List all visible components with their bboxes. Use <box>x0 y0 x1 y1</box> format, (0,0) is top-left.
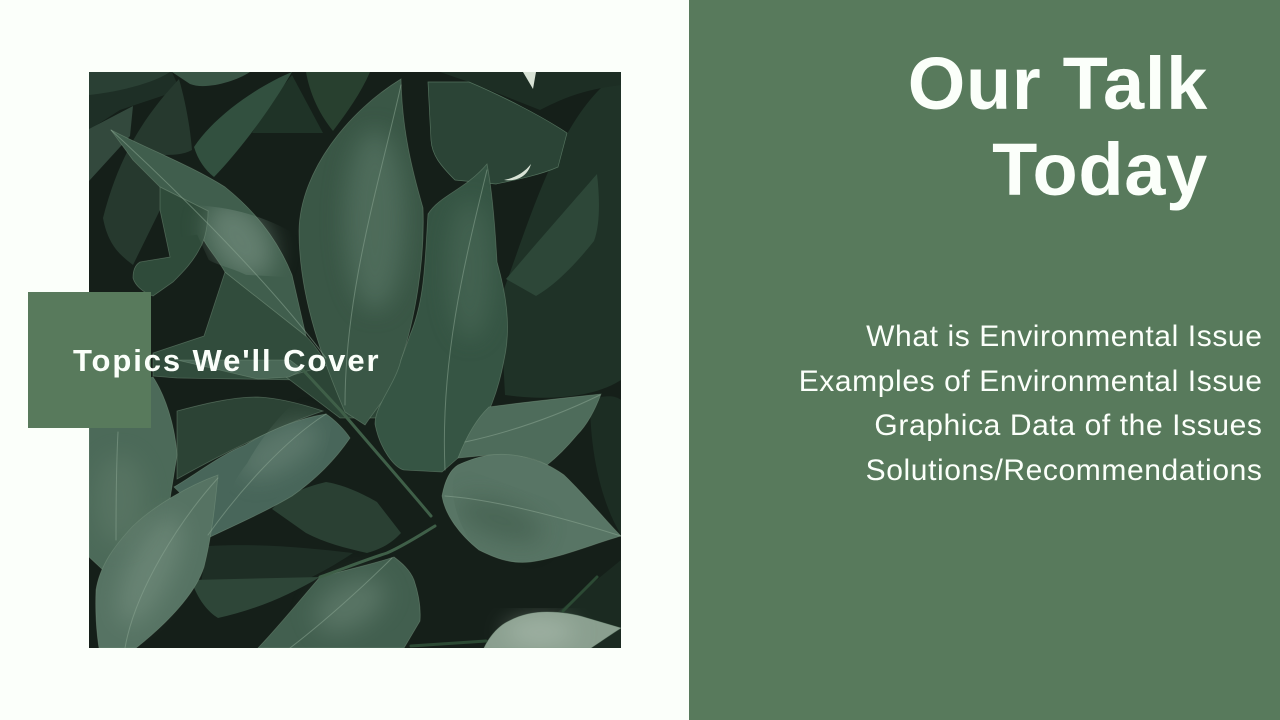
dark background foliage <box>89 72 621 648</box>
accent box behind label <box>28 292 151 428</box>
foreground leaves <box>89 79 621 648</box>
stems and veins <box>111 85 621 648</box>
panel: right green background <box>689 0 1280 720</box>
title: Today <box>992 128 1208 211</box>
title <box>908 42 1208 211</box>
text block: topic list: What is Environmental Issue <box>866 320 1262 353</box>
label: topics: Topics We'll Cover <box>73 343 380 378</box>
text block: topic list: Examples of Environmental Issue <box>799 365 1262 398</box>
leaf highlights <box>95 130 575 644</box>
white leaf shards <box>504 72 536 180</box>
photo: dark green leaves <box>89 72 621 648</box>
title: Our Talk <box>908 42 1208 125</box>
text block: topic list: Solutions/Recommendations <box>866 454 1262 487</box>
text block: topic list: Graphica Data of the Issues <box>874 409 1262 442</box>
text block: topic list <box>799 320 1262 487</box>
